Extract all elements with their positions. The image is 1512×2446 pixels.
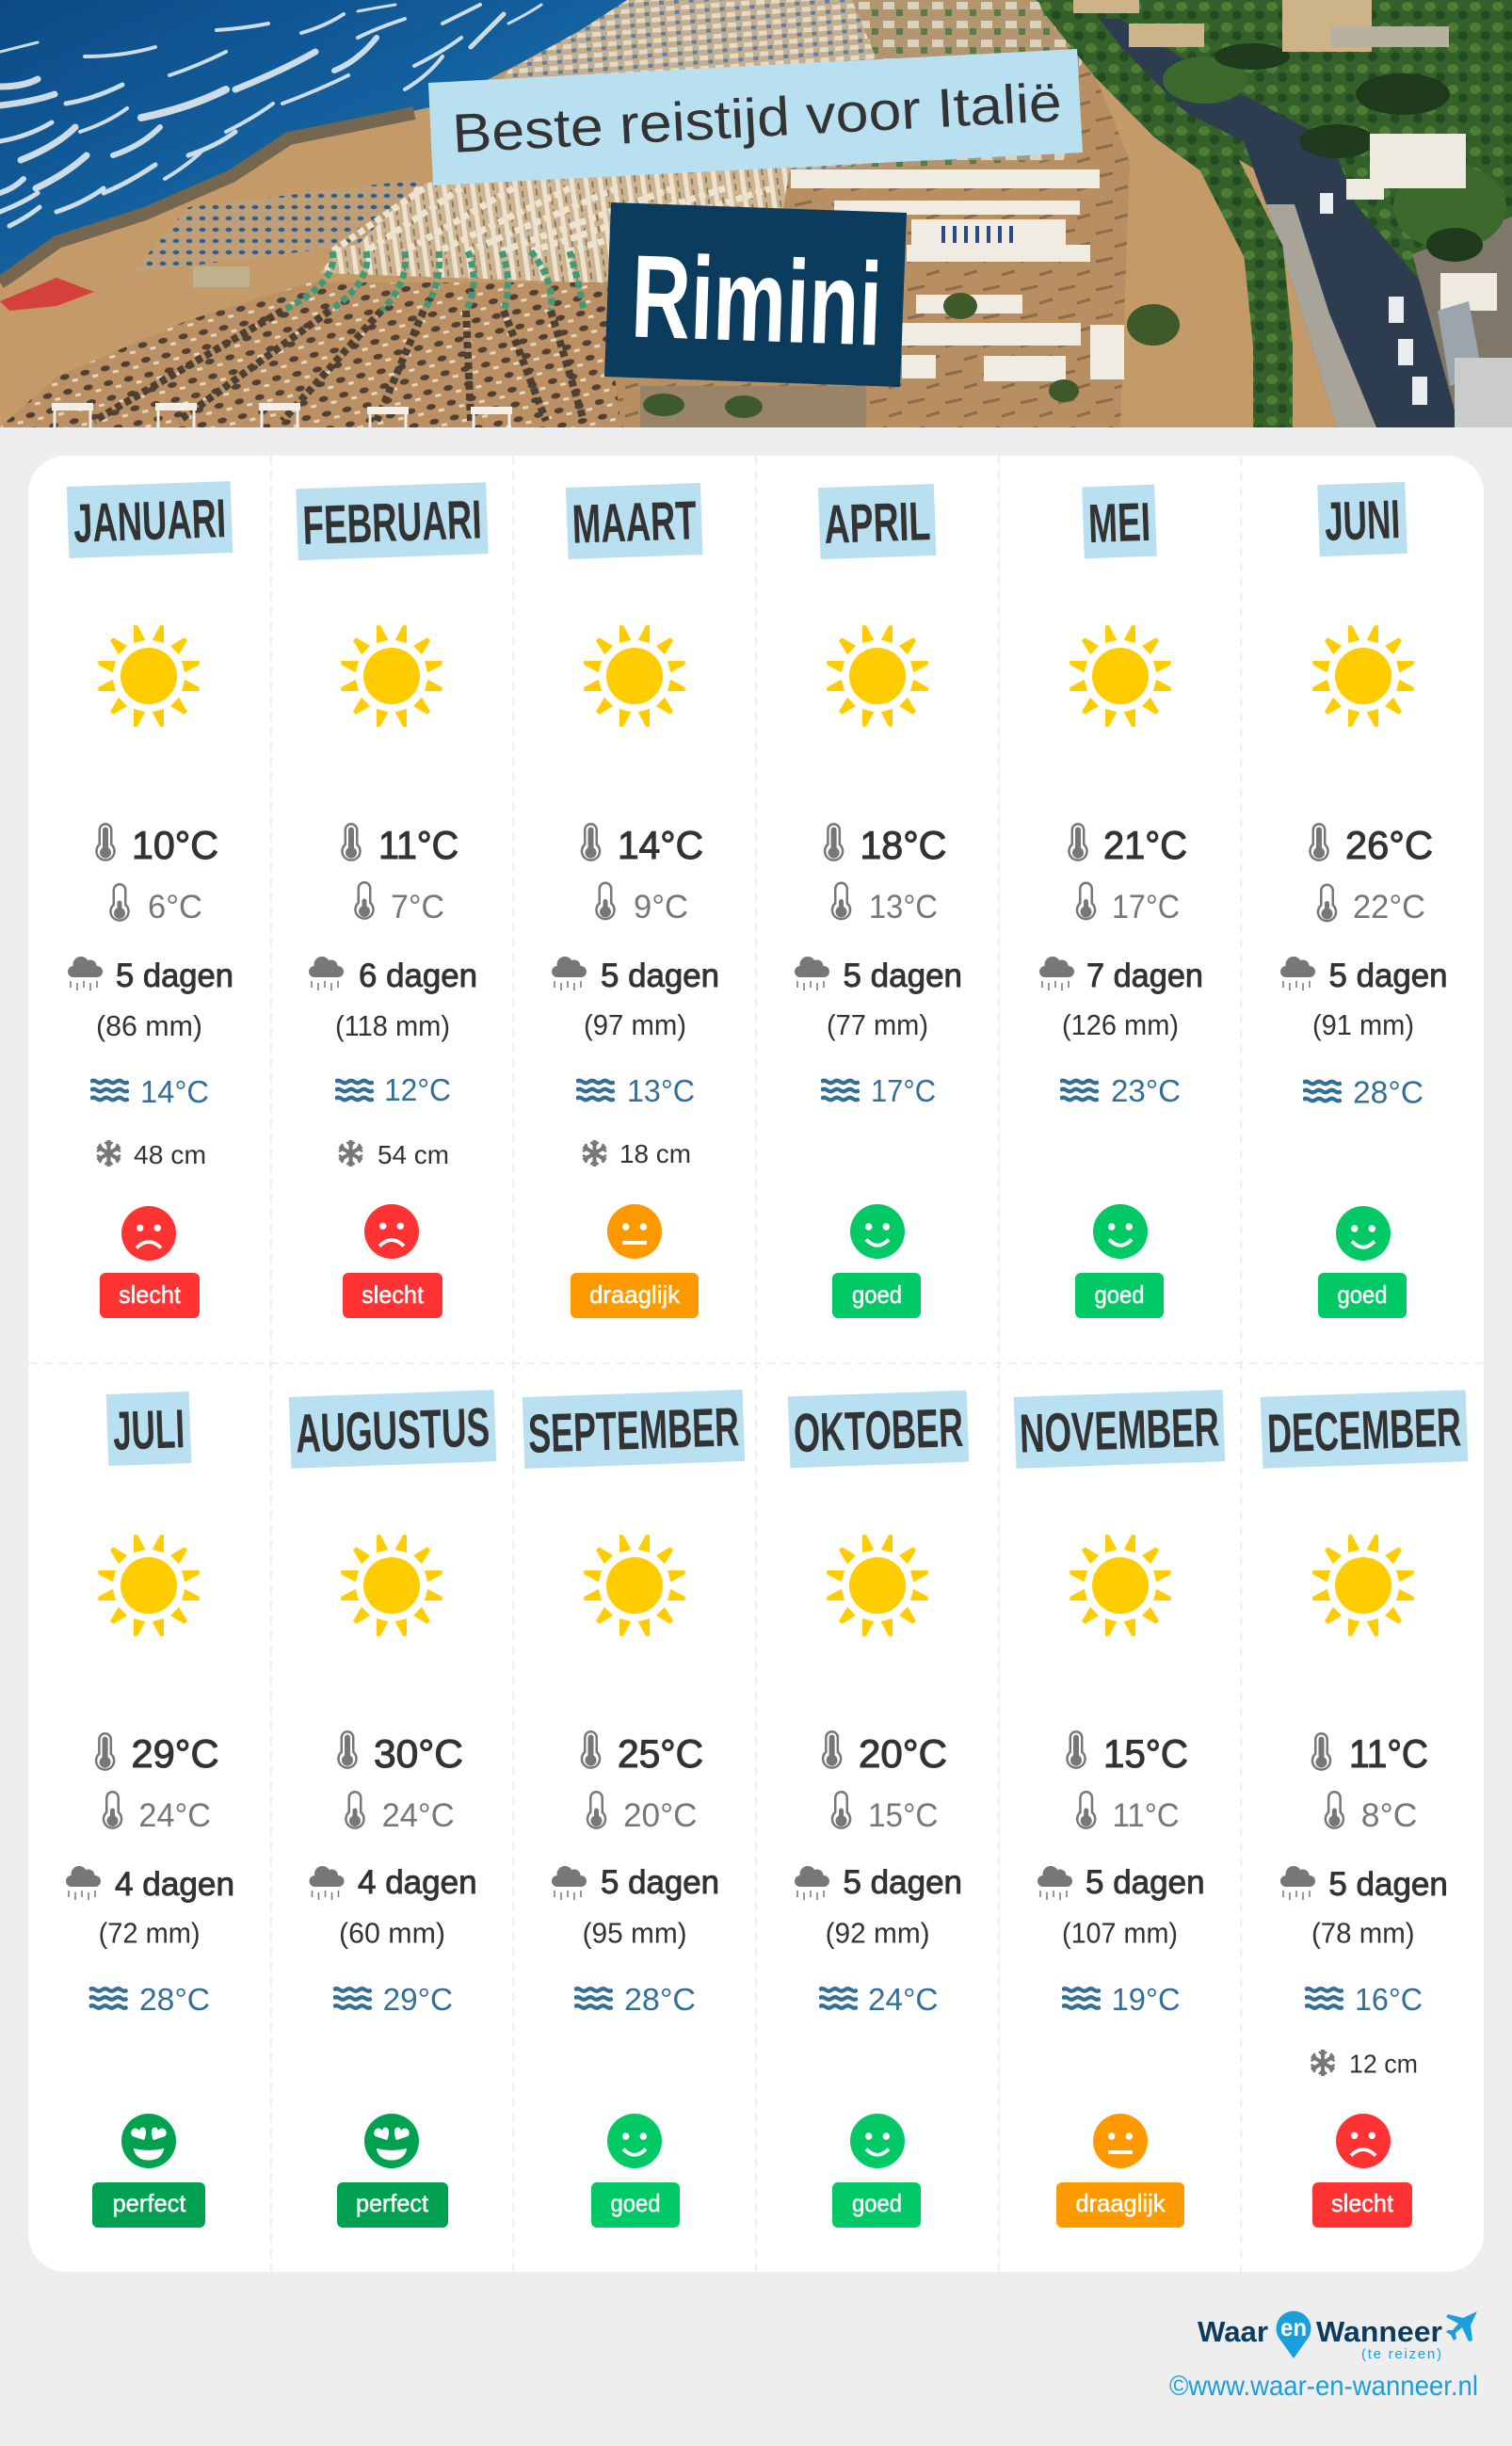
- month heading: [289, 1390, 496, 1469]
- month: juni: [1280, 482, 1448, 1318]
- month heading: FEBRUARI: [301, 489, 483, 556]
- icon: sun: [584, 1535, 685, 1636]
- sea temperature: [90, 1074, 209, 1109]
- rating badge: perfect: [113, 2189, 186, 2217]
- max temperature: 11°C: [378, 823, 458, 867]
- rating badge: [100, 1273, 200, 1318]
- month: mei: [1039, 485, 1203, 1318]
- logo: Waar en Wanneer: Wanneer: [1316, 2315, 1442, 2348]
- max temperature: 14°C: [618, 823, 703, 867]
- month: december: [1261, 1390, 1468, 2228]
- rainfall: (97 mm): [584, 1008, 686, 1041]
- month heading: AUGUSTUS: [295, 1396, 491, 1465]
- rating badge: [1056, 2182, 1184, 2228]
- min temperature: 17°C: [1112, 889, 1180, 925]
- rating badge: goed: [1337, 1280, 1388, 1309]
- min temperature: 20°C: [623, 1797, 697, 1834]
- rainfall: (78 mm): [1311, 1917, 1414, 1949]
- heading: Rimini: [604, 202, 907, 387]
- sea temperature: 14°C: [140, 1074, 209, 1109]
- sea temperature: 12°C: [384, 1072, 451, 1107]
- rain days: 5 dagen: [116, 957, 233, 994]
- logo: Waar en Wanneer: (te reizen): [1361, 2346, 1441, 2362]
- month heading: MAART: [571, 490, 698, 555]
- sea temperature: [821, 1073, 936, 1108]
- sea temperature: [1062, 1982, 1181, 2017]
- min temperature: 22°C: [1353, 889, 1425, 925]
- rating badge: [92, 2182, 205, 2228]
- rainfall: (60 mm): [339, 1917, 445, 1949]
- month: september: [523, 1390, 745, 2228]
- icon: sun: [1312, 625, 1414, 727]
- icon: sun: [98, 625, 200, 727]
- rainfall: (92 mm): [826, 1917, 930, 1949]
- rating badge: [571, 1273, 699, 1318]
- month heading: [788, 1391, 969, 1468]
- max temperature: 10°C: [132, 823, 218, 867]
- rating badge: [832, 2182, 921, 2228]
- min temperature: 24°C: [138, 1797, 211, 1834]
- max temperature: 29°C: [132, 1731, 218, 1776]
- rating face: [1336, 1206, 1391, 1261]
- month: april: [795, 484, 962, 1318]
- min temperature: 9°C: [634, 889, 688, 925]
- rain days: 4 dagen: [358, 1864, 477, 1901]
- website credit: ©www.waar-en-wanneer.nl: [1169, 2371, 1478, 2402]
- sea temperature: 19°C: [1112, 1982, 1181, 2017]
- rain days: [552, 957, 719, 994]
- max temperature: 25°C: [618, 1731, 703, 1776]
- rating badge: [832, 1273, 921, 1318]
- min temperature: [1317, 883, 1425, 925]
- rating face: [607, 2114, 662, 2168]
- rainfall: (126 mm): [1062, 1008, 1179, 1041]
- min temperature: 13°C: [869, 889, 938, 925]
- max temperature: 26°C: [1345, 823, 1433, 867]
- rating face: [364, 1204, 419, 1259]
- max temperature: 30°C: [374, 1731, 463, 1776]
- rating face: [607, 1204, 662, 1259]
- month heading: MEI: [1087, 491, 1151, 555]
- rating face: [850, 1204, 905, 1259]
- rainfall: (86 mm): [96, 1009, 202, 1042]
- icon: sun: [1312, 1535, 1414, 1636]
- month heading: [523, 1390, 745, 1469]
- snow: 12 cm: [1349, 2049, 1418, 2079]
- month heading: JUNI: [1324, 489, 1401, 553]
- max temperature: [1066, 1730, 1188, 1776]
- min temperature: [1076, 881, 1180, 925]
- rating badge: goed: [610, 2189, 661, 2217]
- month: november: [1014, 1390, 1225, 2228]
- month: augustus: [289, 1390, 496, 2228]
- sea temperature: 16°C: [1355, 1982, 1423, 2017]
- rating face: [364, 2114, 419, 2168]
- max temperature: [341, 823, 458, 867]
- month heading: [1317, 482, 1407, 556]
- rain days: 4 dagen: [115, 1866, 234, 1903]
- logo: Waar en Wanneer: Waar: [1198, 2315, 1268, 2348]
- rain days: 6 dagen: [359, 957, 477, 994]
- rain days: 5 dagen: [844, 957, 962, 994]
- max temperature: [1311, 1731, 1428, 1776]
- month: juli: [66, 1392, 234, 2228]
- rating badge: slecht: [119, 1280, 182, 1309]
- max temperature: [822, 1730, 947, 1776]
- month: februari: [296, 482, 489, 1318]
- snow: 18 cm: [619, 1139, 691, 1168]
- sea temperature: [576, 1073, 695, 1108]
- max temperature: [337, 1730, 463, 1776]
- rainfall: (118 mm): [335, 1009, 450, 1042]
- sea temperature: [1305, 1982, 1423, 2017]
- rating badge: slecht: [362, 1280, 425, 1309]
- rating badge: goed: [1094, 1280, 1145, 1309]
- sea temperature: 23°C: [1111, 1073, 1181, 1108]
- min temperature: 6°C: [148, 889, 202, 925]
- sea temperature: [1060, 1073, 1181, 1108]
- hero photo: Rimini beach: [0, 0, 1512, 427]
- min temperature: [1076, 1791, 1180, 1834]
- max temperature: [824, 823, 946, 867]
- rainfall: (77 mm): [827, 1008, 928, 1041]
- rain days: 5 dagen: [1328, 1866, 1448, 1903]
- rain days: [795, 957, 962, 994]
- icon: plane: [1446, 2311, 1477, 2341]
- rain days: 5 dagen: [1086, 1864, 1205, 1901]
- sea temperature: 28°C: [1353, 1075, 1424, 1109]
- rating face: [850, 2114, 905, 2168]
- sea temperature: [335, 1072, 451, 1107]
- max temperature: 15°C: [1103, 1731, 1188, 1776]
- min temperature: 15°C: [868, 1797, 938, 1834]
- min temperature: [103, 1791, 211, 1834]
- rainfall: (95 mm): [583, 1917, 687, 1949]
- max temperature: 18°C: [860, 823, 946, 867]
- min temperature: 8°C: [1361, 1797, 1418, 1834]
- sea temperature: [89, 1982, 210, 2017]
- min temperature: 7°C: [391, 889, 444, 925]
- month heading: [566, 483, 702, 559]
- logo: Waar en Wanneer: en: [1280, 2313, 1307, 2341]
- panel: climate table card: [28, 456, 1484, 2272]
- rating badge: slecht: [1331, 2189, 1394, 2217]
- min temperature: 11°C: [1113, 1797, 1180, 1834]
- min temperature: [109, 883, 202, 925]
- month heading: [67, 481, 233, 558]
- rating badge: goed: [852, 2189, 902, 2217]
- month: maart: [552, 483, 719, 1318]
- month: oktober: [788, 1391, 969, 2228]
- sea temperature: [1303, 1075, 1424, 1109]
- rain days: 5 dagen: [1329, 957, 1448, 994]
- sea temperature: 28°C: [139, 1982, 210, 2017]
- snow: [97, 1140, 206, 1169]
- rating badge: goed: [852, 1280, 902, 1309]
- month heading: [106, 1392, 191, 1466]
- icon: location pin: [1277, 2311, 1311, 2358]
- icon: sun: [1070, 1535, 1171, 1636]
- max temperature: 20°C: [859, 1731, 947, 1776]
- rating face: [1093, 1204, 1148, 1259]
- month heading: [1082, 485, 1157, 558]
- rating badge: [1312, 2182, 1412, 2228]
- rain days: [309, 957, 477, 994]
- logo: Waar en Wanneer: [1198, 2311, 1477, 2362]
- min temperature: [595, 881, 688, 925]
- month heading: OKTOBER: [793, 1397, 964, 1464]
- heading: Rimini: Rimini: [629, 231, 884, 371]
- rating badge: [343, 1273, 442, 1318]
- rating face: [1093, 2114, 1148, 2168]
- rain days: 5 dagen: [601, 957, 719, 994]
- icon: sun: [98, 1535, 200, 1636]
- max temperature: [581, 1730, 703, 1776]
- month heading: [1014, 1390, 1225, 1469]
- snow: 54 cm: [378, 1140, 449, 1169]
- min temperature: [1325, 1791, 1418, 1834]
- max temperature: [581, 823, 703, 867]
- snow: 48 cm: [134, 1140, 206, 1169]
- rating badge: [591, 2182, 680, 2228]
- max temperature: 11°C: [1349, 1731, 1428, 1776]
- snow: [583, 1139, 691, 1168]
- min temperature: [831, 1791, 938, 1834]
- month heading: [818, 484, 936, 559]
- month heading: JANUARI: [72, 488, 227, 555]
- icon: sun: [341, 1535, 442, 1636]
- month heading: SEPTEMBER: [527, 1396, 740, 1465]
- rating badge: [337, 2182, 448, 2228]
- icon: sun: [827, 1535, 928, 1636]
- rain days: 5 dagen: [601, 1864, 719, 1901]
- sea temperature: 17°C: [871, 1073, 936, 1108]
- rainfall: (107 mm): [1062, 1917, 1178, 1949]
- rating face: [1336, 2114, 1391, 2168]
- max temperature: [95, 823, 218, 867]
- icon: sun: [584, 625, 685, 727]
- rain days: 5 dagen: [844, 1864, 962, 1901]
- min temperature: [587, 1791, 697, 1834]
- title banner: [428, 49, 1083, 185]
- rain days: [1039, 957, 1203, 994]
- sea temperature: 24°C: [868, 1982, 938, 2017]
- sea temperature: [574, 1982, 696, 2017]
- rainfall: (91 mm): [1312, 1008, 1414, 1041]
- snow: [339, 1140, 449, 1169]
- month heading: [296, 482, 489, 560]
- rating badge: [1075, 1273, 1164, 1318]
- max temperature: 21°C: [1103, 823, 1187, 867]
- rating badge: [1318, 1273, 1407, 1318]
- rating badge: draaglijk: [1075, 2189, 1166, 2217]
- min temperature: [345, 1791, 455, 1834]
- month: januari: [67, 481, 233, 1318]
- snow: [1311, 2049, 1418, 2079]
- min temperature: [831, 881, 938, 925]
- min temperature: 24°C: [382, 1797, 455, 1834]
- icon: sun: [1070, 625, 1171, 727]
- month heading: APRIL: [823, 491, 931, 555]
- rating face: [121, 2114, 176, 2168]
- sea temperature: [333, 1982, 453, 2017]
- rain days: [68, 957, 233, 994]
- icon: sun: [341, 625, 442, 727]
- month heading: NOVEMBER: [1019, 1396, 1220, 1465]
- rainfall: (72 mm): [99, 1917, 201, 1949]
- max temperature: [1068, 823, 1187, 867]
- sea temperature: 29°C: [383, 1982, 453, 2017]
- rain days: 7 dagen: [1086, 957, 1203, 994]
- min temperature: [354, 881, 444, 925]
- sea temperature: 28°C: [624, 1982, 696, 2017]
- rating face: [121, 1206, 176, 1261]
- sea temperature: 13°C: [627, 1073, 695, 1108]
- sea temperature: [819, 1982, 938, 2017]
- rating badge: draaglijk: [589, 1280, 681, 1309]
- title banner: Beste reistijd voor Italië: [451, 72, 1063, 165]
- rating badge: perfect: [356, 2189, 429, 2217]
- month heading: JULI: [112, 1398, 185, 1462]
- rain days: [1280, 957, 1448, 994]
- icon: sun: [827, 625, 928, 727]
